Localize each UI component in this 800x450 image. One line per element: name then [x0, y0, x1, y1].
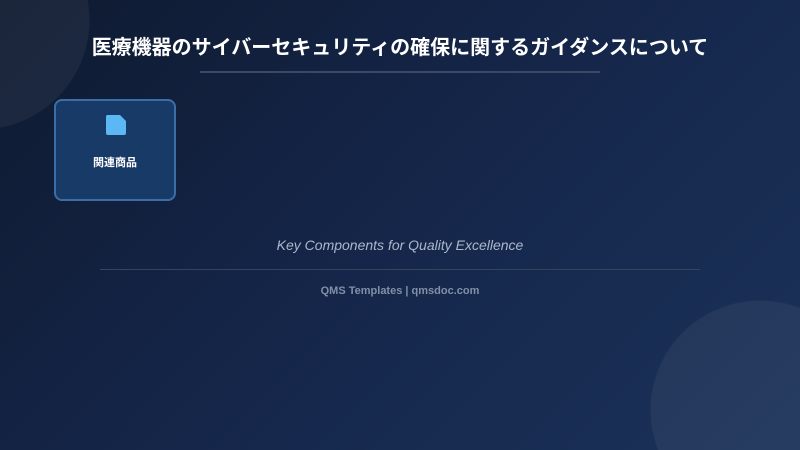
footer: QMS Templates | qmsdoc.com [321, 285, 479, 297]
label: 関連商品 [93, 157, 137, 169]
title: 医療機器のサイバーセキュリティの確保に関するガイダンスについて [92, 37, 708, 59]
card: related products [54, 99, 176, 201]
icon: document [106, 115, 126, 135]
subtitle: Key Components for Quality Excellence [277, 237, 523, 253]
